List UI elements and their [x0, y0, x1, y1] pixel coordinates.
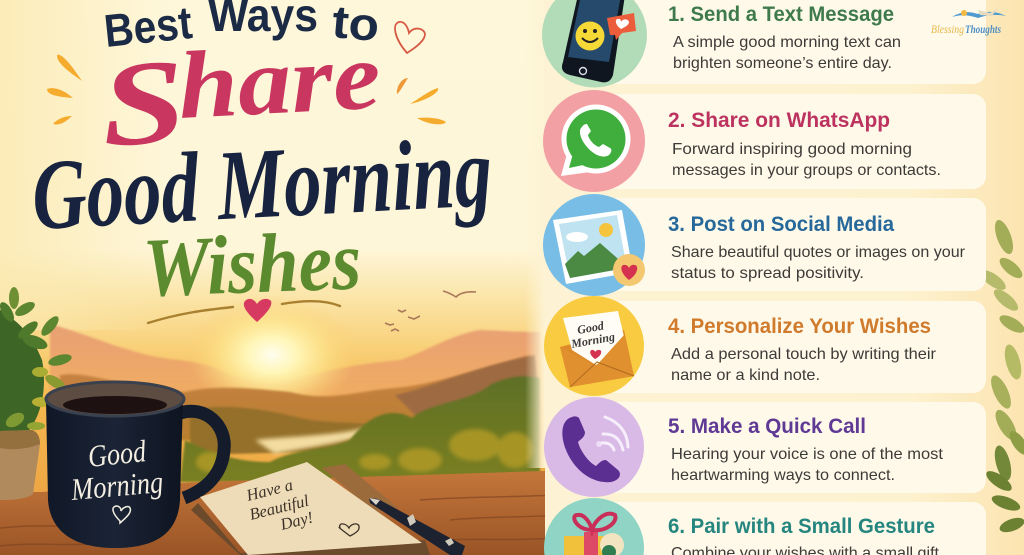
icon: WhatsApp	[543, 90, 645, 192]
step 1 text: 1. Send a Text Message	[668, 3, 894, 26]
leaves: botanical branch	[977, 218, 1024, 535]
notebook heart	[339, 524, 359, 536]
title: share: S	[97, 33, 190, 172]
panel: step 2 card	[600, 94, 986, 189]
heart outline	[395, 22, 425, 53]
logo: Blessing Thoughts: Blessing	[931, 22, 964, 36]
pen	[369, 498, 465, 555]
notebook page	[200, 462, 422, 555]
step 3 text: 3. Post on Social Media	[668, 213, 894, 236]
sunburst strokes	[47, 55, 446, 125]
icon: envelope note: Morning	[569, 330, 616, 351]
mug lettering: Morning	[69, 464, 164, 507]
step 1 text	[668, 3, 901, 72]
dark right ridge	[395, 355, 540, 420]
step 6 text: 6. Pair with a Small Gesture	[668, 515, 935, 538]
notebook cover	[322, 464, 398, 512]
icon: envelope note	[544, 296, 644, 396]
icon: phone with smiley	[542, 0, 647, 88]
notebook note: Beautiful	[247, 491, 311, 524]
forest trees	[180, 376, 540, 482]
step 4 text: name or a kind note.	[671, 367, 820, 384]
landscape scene	[50, 295, 540, 482]
icon: gift	[544, 498, 644, 555]
title: wishes: Wishes	[141, 214, 363, 315]
mid ridges	[60, 355, 540, 440]
step 4 text	[668, 315, 937, 384]
step 6 text	[668, 515, 940, 555]
icon: photo with heart	[543, 194, 645, 296]
title: share	[97, 22, 383, 172]
pot	[0, 430, 40, 500]
coffee	[63, 396, 167, 414]
step 4 text: Add a personal touch by writing their	[671, 346, 937, 363]
mug lettering	[69, 433, 164, 507]
mug rim	[46, 382, 184, 416]
step 4 text: 4. Personalize Your Wishes	[668, 315, 931, 338]
notebook	[191, 462, 465, 555]
title: good morning: Good Morning	[29, 116, 495, 251]
step 3 text	[668, 213, 966, 282]
background: sunrise sky	[0, 0, 560, 555]
right panel background	[545, 0, 1024, 555]
icon: telephone	[544, 397, 644, 497]
notebook side pages	[191, 503, 430, 555]
panel: step 4 card	[600, 301, 986, 393]
notebook note: Day!	[277, 507, 315, 534]
panel: step 6 card	[600, 502, 986, 555]
valley river	[255, 426, 372, 454]
mug handle	[180, 411, 224, 498]
panel: step 3 card	[600, 198, 986, 291]
step 2 text: 2. Share on WhatsApp	[668, 109, 890, 132]
step 3 text: status to spread positivity.	[671, 265, 864, 282]
mug lettering: Good	[86, 433, 148, 474]
near ridge	[190, 407, 385, 455]
coffee mug	[46, 382, 224, 548]
wooden table	[0, 470, 575, 555]
sun glow	[187, 295, 357, 415]
notebook note: Have a	[243, 475, 295, 505]
notebook note	[243, 475, 315, 534]
logo: Blessing Thoughts: Thoughts	[965, 22, 1001, 36]
step 5 text: Hearing your voice is one of the most	[671, 446, 944, 463]
title: share: hare	[175, 22, 383, 139]
step 3 text: Share beautiful quotes or images on your	[671, 244, 966, 261]
title: best ways to	[102, 0, 381, 57]
step 5 text	[668, 415, 944, 484]
step 1 text: A simple good morning text can	[673, 34, 901, 51]
logo: Blessing Thoughts	[931, 8, 1006, 36]
plant in pot	[0, 287, 73, 500]
title	[29, 0, 495, 315]
panel: step 5 card	[600, 402, 986, 493]
mug body	[46, 400, 183, 548]
step 5 text: 5. Make a Quick Call	[668, 415, 866, 438]
step 1 text: brighten someone’s entire day.	[673, 55, 892, 72]
mug heart	[113, 506, 130, 523]
sunlit foliage highlights	[196, 429, 533, 472]
panel: step 1 card	[600, 0, 986, 84]
title flourish	[148, 299, 340, 323]
birds	[385, 291, 476, 331]
far mountains	[50, 324, 540, 440]
step 2 text: messages in your groups or contacts.	[672, 162, 941, 179]
step 2 text	[668, 109, 941, 179]
step 5 text: heartwarming ways to connect.	[671, 467, 895, 484]
icon: envelope note: Good	[576, 318, 606, 337]
plant foliage	[0, 287, 73, 435]
step 2 text: Forward inspiring good morning	[672, 141, 912, 158]
